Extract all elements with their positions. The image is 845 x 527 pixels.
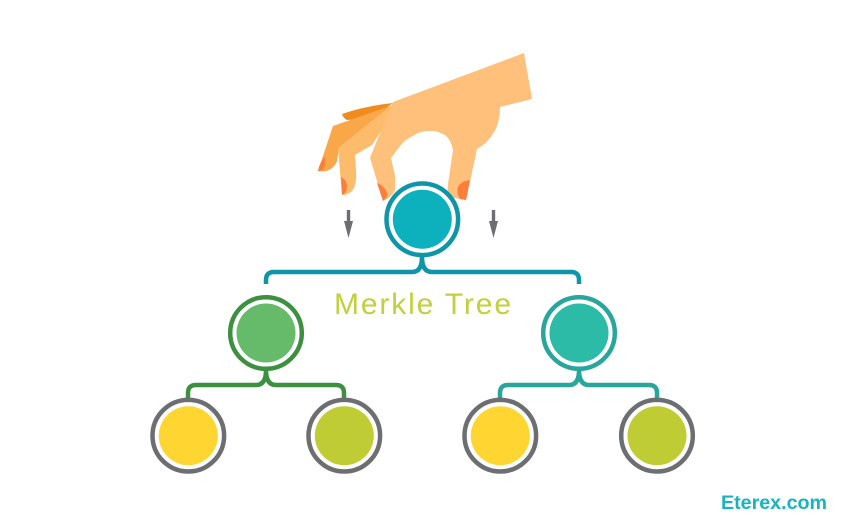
node: leaf 1 yellow	[152, 400, 224, 472]
node: leaf 4 lime	[621, 400, 693, 472]
node: root	[386, 184, 458, 255]
node: leaf 2 lime	[308, 400, 380, 472]
arrow: left down	[344, 210, 353, 238]
connector: left branch	[188, 370, 344, 398]
node: leaf 3 yellow	[464, 400, 536, 472]
node: level two left	[230, 297, 302, 369]
node: level two right	[543, 297, 615, 369]
connector: root to level two	[266, 257, 579, 284]
connector: right branch	[500, 370, 657, 398]
heading: Merkle Tree: Merkle Tree	[334, 288, 511, 321]
arrow: right down	[489, 210, 498, 238]
brand label: Eterex.com: Eterex.com	[721, 493, 827, 514]
icon: hand picking the root node	[318, 53, 532, 201]
